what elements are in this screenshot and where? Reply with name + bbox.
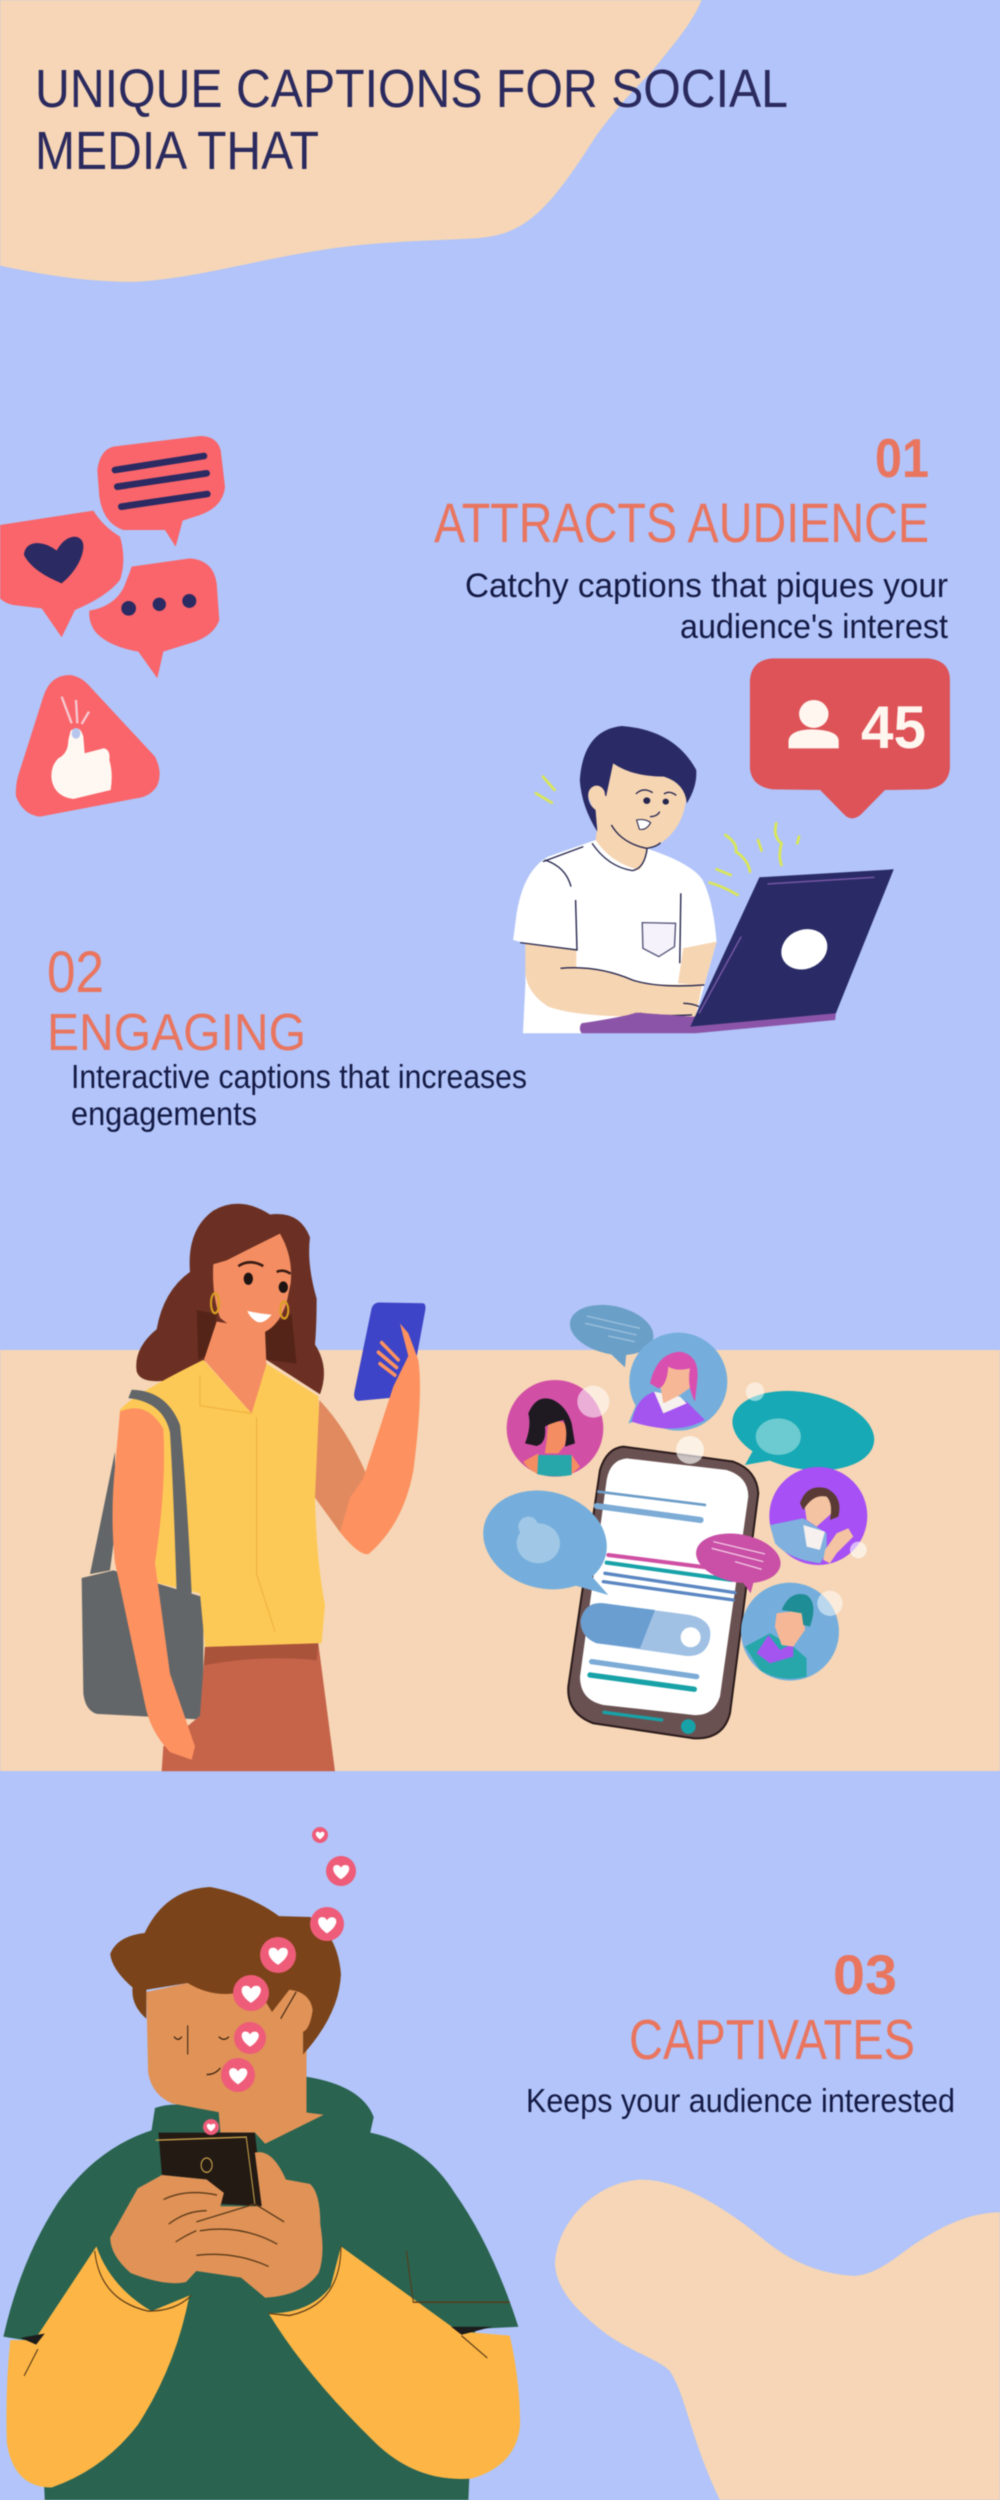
hands [110, 2152, 323, 2298]
shoulder bag [82, 1570, 203, 1720]
face line details [174, 1992, 296, 2075]
title: UNIQUE CAPTIONS FOR SOCIAL [35, 59, 788, 119]
small blue speech bubble [565, 1298, 658, 1367]
yellow left sleeve [6, 2246, 189, 2487]
heart 2 [326, 1856, 356, 1886]
heart 8 [203, 2119, 219, 2135]
teal speech bubble [726, 1380, 881, 1481]
laptop lid [690, 869, 894, 1027]
left arm and hand [112, 1408, 195, 1760]
ear [272, 1990, 313, 2050]
blue phone [354, 1302, 426, 1401]
shirt [513, 839, 717, 1033]
heart 3 [310, 1907, 344, 1941]
icon: typing dots bubble [89, 558, 219, 678]
section 02 text: ENGAGING [47, 1004, 306, 1062]
section 01 text [434, 427, 949, 646]
section 01 text: audience's interest [680, 608, 949, 646]
section 03 text: Keeps your audience interested [526, 2082, 955, 2119]
hair [110, 1887, 341, 2054]
heart 1 [312, 1827, 328, 1843]
section 02 text [47, 940, 527, 1132]
illustration: phone with social chat [472, 1298, 881, 1738]
avatar: woman with blue dress [769, 1467, 867, 1565]
bag strap [128, 1390, 192, 1593]
icon: text lines bubble [97, 436, 225, 547]
clothing outlines [520, 825, 704, 1016]
right forearm and hand [340, 1324, 420, 1554]
illustration: woman with phone and bag [82, 1204, 426, 1771]
icon group: social reaction bubbles [0, 436, 225, 817]
icon: thumbs up triangle [16, 675, 160, 817]
avatar: man with teal hair [741, 1583, 843, 1681]
top peach blob [0, 0, 702, 282]
illustration: man with laptop [513, 726, 894, 1033]
section 03 text: 03 [833, 1943, 897, 2006]
section 02 text: engagements [71, 1095, 257, 1132]
hair [136, 1204, 324, 1394]
heart 6 [234, 2022, 266, 2054]
avatar: woman with pink hair [628, 1333, 727, 1431]
smartphone [568, 1436, 758, 1738]
icon: heart bubble [0, 511, 123, 637]
peach middle band [0, 1350, 1000, 1771]
section 02 text: 02 [47, 940, 104, 1005]
right upper arm [315, 1400, 367, 1532]
neck [219, 2050, 324, 2144]
section 01 text: Catchy captions that piques your [465, 567, 948, 605]
dark sleeve shadows [21, 2327, 492, 2345]
inner hair shadow [197, 1310, 297, 1364]
pink speech bubble [692, 1527, 784, 1593]
green t-shirt [3, 2077, 518, 2500]
heart 4 [260, 1937, 296, 1973]
bag back strap [90, 1452, 115, 1574]
laptop logo [773, 921, 835, 977]
large blue speech bubble [472, 1477, 618, 1603]
laptop base [580, 1013, 836, 1033]
face [146, 1983, 303, 2112]
neck [204, 1322, 267, 1413]
section 02 text: Interactive captions that increases [71, 1058, 527, 1095]
title [35, 59, 788, 181]
black phone [158, 2133, 263, 2206]
excitement sparks [536, 777, 799, 895]
title: MEDIA THAT [35, 121, 319, 181]
avatar: woman with black hair [507, 1380, 609, 1477]
arms [525, 942, 717, 1017]
illustration: man smiling at phone [3, 1887, 520, 2500]
heart 7 [221, 2058, 255, 2092]
follower count notification bubble [750, 658, 950, 818]
head [580, 726, 696, 870]
heart 5 [233, 1975, 269, 2011]
section 03 text: CAPTIVATES [629, 2008, 915, 2072]
section 03 text [526, 1943, 955, 2119]
shirt pocket [642, 923, 676, 957]
section 01 text: 01 [875, 427, 929, 489]
face [211, 1234, 291, 1335]
bottom peach blob [555, 2180, 1000, 2500]
yellow right sleeve [269, 2246, 520, 2479]
follower count notification bubble: 45 [861, 694, 926, 761]
yellow blouse [113, 1360, 325, 1647]
floating like hearts [203, 1827, 356, 2135]
skirt [162, 1643, 335, 1771]
